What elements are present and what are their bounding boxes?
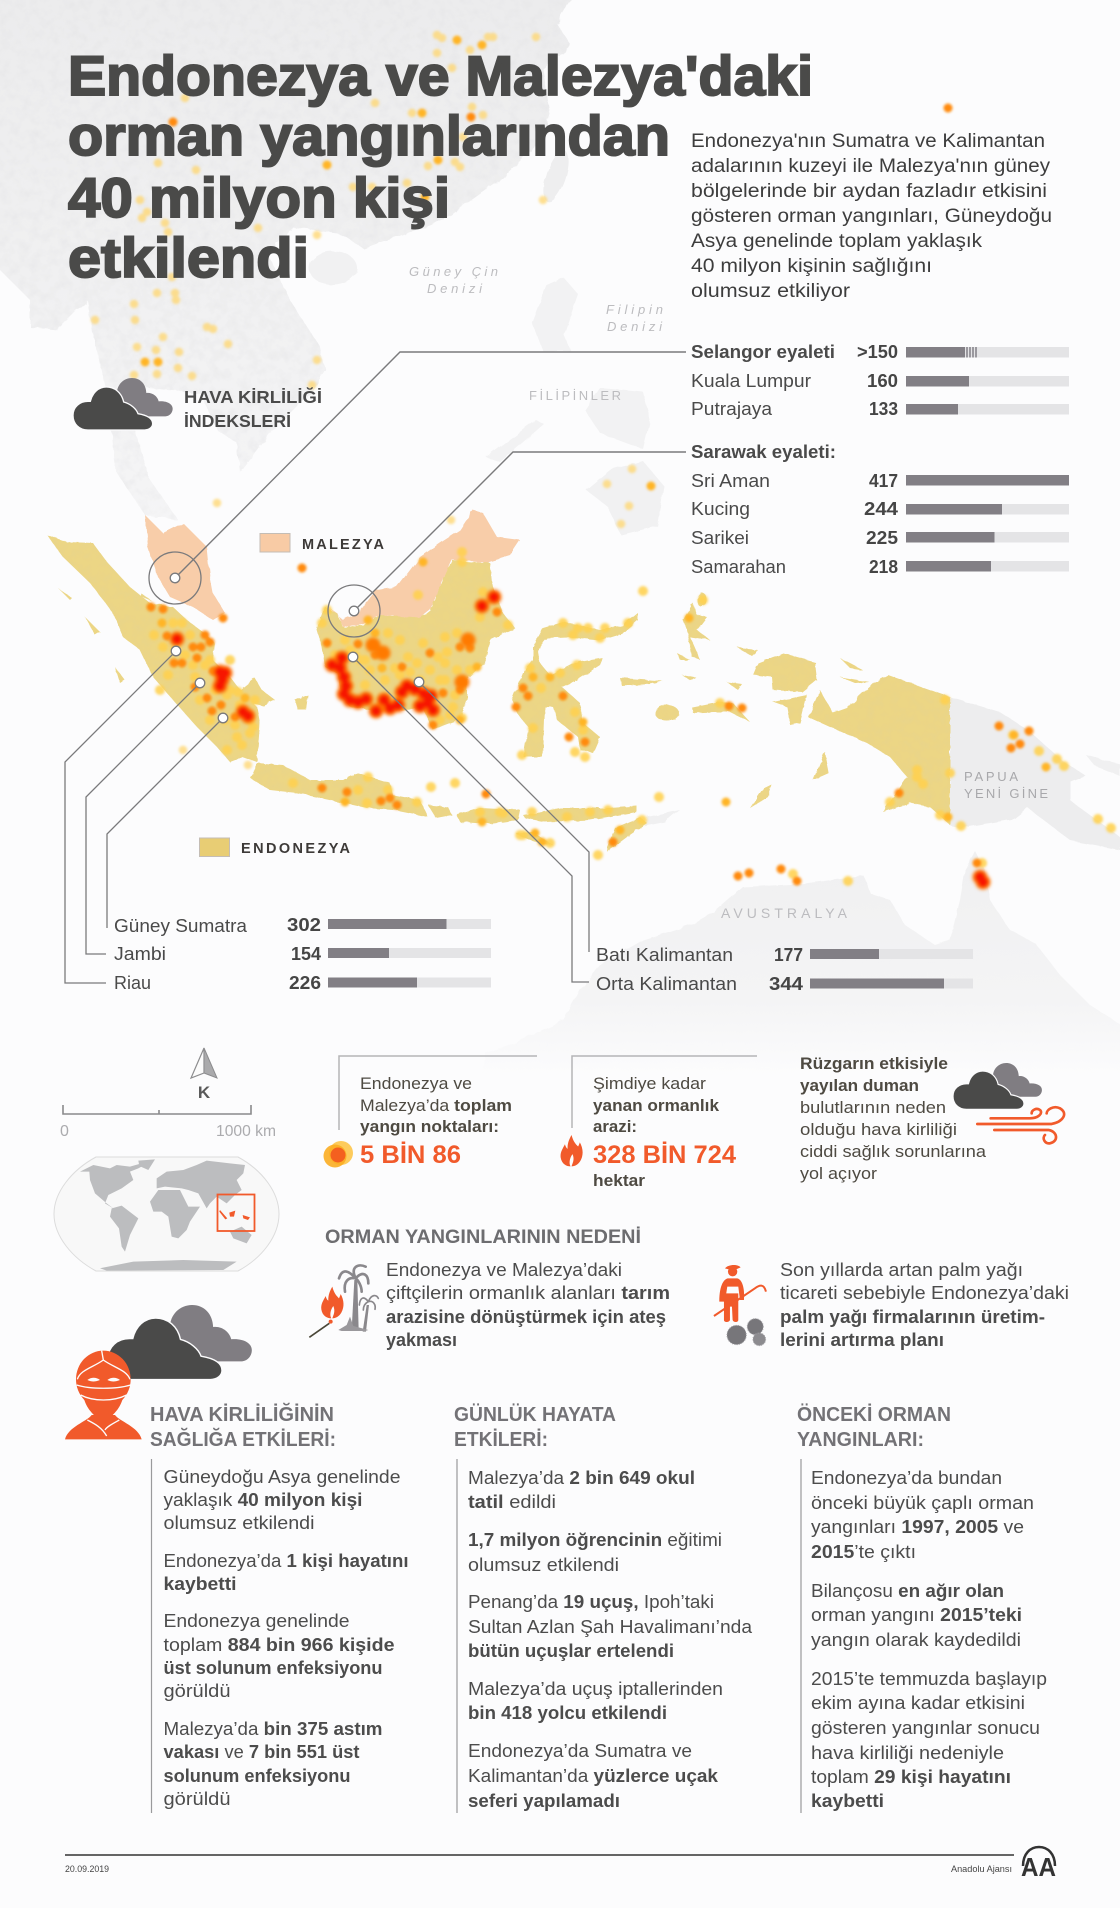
sea and country labels: YENİ GİNE (964, 786, 1048, 801)
stat: burned forest area: hektar (593, 1172, 646, 1190)
text: cause one (386, 1260, 670, 1350)
chart: Kalimantan air pollution bars (596, 945, 973, 994)
stat: total fire points: Malezya’da toplam (360, 1097, 512, 1115)
sea and country labels: Denizi (607, 319, 663, 334)
text: cause two: Son yıllarda artan palm yağı (780, 1260, 1023, 1280)
title: 40 milyon kişi (68, 166, 450, 229)
stat: burned forest area: Şimdiye kadar (593, 1075, 707, 1093)
chart: Sarawak air pollution bars: Samarahan (691, 557, 786, 577)
chart: Kalimantan air pollution bars: 344 (769, 974, 803, 994)
chart: Sarawak air pollution bars: 417 (869, 471, 898, 491)
chart: Sumatra air pollution bars (114, 915, 491, 993)
chart: Sarawak air pollution bars: 244 (864, 499, 898, 519)
icon: fire dot (324, 1141, 353, 1168)
stat: total fire points: 5 BİN 86 (360, 1141, 461, 1169)
column: effects on daily life: Kalimantan’da yüzlerce uçak (468, 1766, 719, 1786)
column: health effects: görüldü (164, 1681, 230, 1701)
text: smoke effect: olduğu hava kirliliği (800, 1121, 957, 1139)
column: health effects: Malezya’da bin 375 astım (164, 1719, 382, 1739)
sea and country labels: FİLİPİNLER (529, 388, 621, 403)
chart: Sumatra air pollution bars: Jambi (114, 944, 166, 964)
column: previous forest fires: toplam 29 kişi hayatını (811, 1767, 1011, 1787)
chart: Selangor air pollution bars: Putrajaya (691, 399, 773, 419)
column: previous forest fires: ÖNCEKİ ORMAN (797, 1403, 951, 1426)
text: cause one: Endonezya ve Malezya’daki (386, 1260, 622, 1280)
column: effects on daily life: bütün uçuşlar ertelendi (468, 1641, 674, 1661)
text: cause one: yakması (386, 1330, 457, 1350)
column: previous forest fires: yangınları 1997, 2005 ve (811, 1517, 1024, 1537)
text: smoke effect: bulutlarının neden (800, 1099, 946, 1117)
icon: clouds and wind (953, 1063, 1064, 1143)
column: health effects: toplam 884 bin 966 kişide (164, 1635, 394, 1655)
stat: burned forest area: arazi: (593, 1118, 637, 1136)
icon: clouds with air pollution index heading (73, 378, 322, 431)
chart: Kalimantan air pollution bars: 177 (774, 945, 803, 965)
column: previous forest fires: gösteren yangınlar sonucu (811, 1718, 1040, 1738)
column: previous forest fires: hava kirliliği nedeniyle (811, 1743, 1004, 1763)
chart: Sumatra air pollution bars: 154 (291, 944, 321, 964)
title: orman yangınlarından (68, 104, 670, 167)
chart: Sumatra air pollution bars: 226 (289, 973, 321, 993)
chart: Selangor air pollution bars: Kuala Lumpur (691, 371, 811, 391)
intro text: Asya genelinde toplam yaklaşık (691, 231, 983, 252)
chart: Sarawak air pollution bars: Sarikei (691, 528, 749, 548)
column: health effects: HAVA KİRLİLİĞİNİN (150, 1402, 334, 1426)
legend: Malezya: MALEZYA (302, 537, 385, 553)
column: previous forest fires: ekim ayına kadar etkisini (811, 1693, 1025, 1713)
map: surrounding gray landmasses (0, 0, 1120, 1080)
column: previous forest fires: orman yangını 2015’teki (811, 1605, 1022, 1625)
chart: Sarawak air pollution bars: Sarawak eyaleti: (691, 442, 836, 462)
sea and country labels: Güney Çin (409, 264, 498, 279)
column: previous forest fires: 2015’te temmuzda başlayıp (811, 1669, 1047, 1689)
sea and country labels (409, 264, 1048, 921)
intro text: gösteren orman yangınları, Güneydoğu (691, 206, 1052, 227)
text: smoke effect (800, 1055, 987, 1183)
text: cause one: çiftçilerin ormanlık alanları tarım (386, 1283, 670, 1303)
stat: total fire points: yangın noktaları: (360, 1118, 499, 1136)
column: health effects: yaklaşık 40 milyon kişi (164, 1490, 362, 1510)
intro text (691, 131, 1052, 302)
column: health effects: vakası ve 7 bin 551 üst (164, 1742, 360, 1762)
chart: Sarawak air pollution bars: Sri Aman (691, 471, 770, 491)
icon: north arrow (191, 1048, 217, 1102)
title: etkilendi (68, 226, 309, 289)
legend: Endonezya: ENDONEZYA (241, 841, 351, 857)
column: effects on daily life: Malezya’da 2 bin 649 okul (468, 1468, 695, 1488)
column: effects on daily life (454, 1403, 753, 1813)
column: health effects: Endonezya genelinde (164, 1611, 350, 1631)
column: effects on daily life: bin 418 yolcu etkilendi (468, 1703, 667, 1723)
stat: total fire points: Endonezya ve (360, 1075, 472, 1093)
column: effects on daily life: Sultan Azlan Şah Havalimanı’nda (468, 1617, 753, 1637)
text: cause two: ticareti sebebiyle Endonezya’daki (780, 1283, 1069, 1303)
title: Endonezya ve Malezya'daki (68, 44, 813, 107)
chart: Sumatra air pollution bars: Güney Sumatra (114, 916, 248, 936)
icon: north arrow: K (198, 1083, 211, 1102)
sea and country labels: Denizi (427, 281, 483, 296)
column: previous forest fires: önceki büyük çaplı orman (811, 1493, 1034, 1513)
chart: Selangor air pollution bars: 160 (867, 371, 898, 391)
column: previous forest fires: Bilançosu en ağır olan (811, 1581, 1004, 1601)
locator globe (54, 1157, 279, 1271)
heading: causes of forest fires: ORMAN YANGINLARININ NEDENİ (325, 1225, 641, 1248)
column: health effects: solunum enfeksiyonu (164, 1766, 350, 1786)
column: health effects: görüldü (164, 1789, 230, 1809)
chart: Sarawak air pollution bars: 218 (869, 557, 898, 577)
text: cause two (780, 1260, 1069, 1350)
chart: Selangor air pollution bars (691, 342, 1069, 419)
chart: Sarawak air pollution bars: 225 (866, 528, 898, 548)
map scale bar: 1000 km (216, 1123, 276, 1140)
icon: clouds with air pollution index heading: HAVA KİRLİLİĞİ (184, 386, 322, 407)
chart: Sarawak air pollution bars (691, 442, 1069, 577)
icon: flame (561, 1135, 583, 1166)
column: effects on daily life: olumsuz etkilendi (468, 1555, 619, 1575)
text: cause two: lerini artırma planı (780, 1330, 944, 1350)
column: previous forest fires: 2015’te çıktı (811, 1542, 916, 1562)
chart: Kalimantan air pollution bars: Batı Kalimantan (596, 945, 733, 965)
footer (65, 1847, 1056, 1882)
column: effects on daily life: seferi yapılamadı (468, 1791, 620, 1811)
map: fire hotspots (95, 35, 1111, 882)
map: Malaysia territory (145, 510, 520, 627)
column: effects on daily life: tatil edildi (468, 1492, 556, 1512)
title (68, 44, 813, 289)
footer: Anadolu Ajansı (951, 1864, 1012, 1874)
logo: Anadolu Agency: AA (1021, 1852, 1056, 1882)
column: effects on daily life: Endonezya’da Sumatra ve (468, 1741, 692, 1761)
stat: burned forest area: yanan ormanlık (593, 1097, 720, 1115)
column: previous forest fires: yangın olarak kaydedildi (811, 1630, 1021, 1650)
icon: clouds with air pollution index heading: İNDEKSLERİ (184, 411, 291, 431)
icon: person in mask under clouds (65, 1305, 252, 1439)
icon: palm trees and match (309, 1265, 378, 1337)
column: effects on daily life: 1,7 milyon öğrencinin eğitimi (468, 1530, 722, 1550)
intro text: bölgelerinde bir aydan fazladır etkisini (691, 181, 1047, 202)
intro text: Endonezya'nın Sumatra ve Kalimantan (691, 131, 1045, 152)
chart: Sarawak air pollution bars: Kucing (691, 499, 750, 519)
text: smoke effect: yol açıyor (800, 1165, 878, 1183)
column: previous forest fires (797, 1403, 1047, 1813)
chart: Selangor air pollution bars: >150 (857, 342, 898, 362)
legend: Endonezya (200, 838, 351, 857)
column: health effects: SAĞLIĞA ETKİLERİ: (150, 1427, 336, 1451)
text: smoke effect: ciddi sağlık sorunlarına (800, 1143, 987, 1161)
intro text: adalarının kuzeyi ile Malezya'nın güney (691, 156, 1051, 177)
sea and country labels: AVUSTRALYA (721, 905, 848, 921)
column: health effects: Endonezya’da 1 kişi hayatını (164, 1551, 408, 1571)
footer: 20.09.2019 (65, 1864, 109, 1874)
chart: Sumatra air pollution bars: 302 (287, 915, 321, 935)
chart: Selangor air pollution bars: Selangor eyaleti (691, 342, 835, 362)
chart: Kalimantan air pollution bars: Orta Kalimantan (596, 974, 737, 994)
map scale bar (60, 1105, 276, 1140)
column: health effects: Güneydoğu Asya genelinde (164, 1467, 400, 1487)
map: Indonesia territory (47, 535, 950, 852)
text: cause two: palm yağı firmalarının üretim- (780, 1307, 1045, 1327)
text: cause one: arazisine dönüştürmek için ateş (386, 1307, 666, 1327)
icon: palm oil worker and fruit (714, 1265, 766, 1346)
stat: burned forest area: 328 BİN 724 (593, 1141, 736, 1169)
sea and country labels: Filipin (606, 302, 663, 317)
column: effects on daily life: Penang’da 19 uçuş, Ipoh’taki (468, 1592, 714, 1612)
chart: Sumatra air pollution bars: Riau (114, 973, 151, 993)
intro text: 40 milyon kişinin sağlığını (691, 256, 932, 277)
intro text: olumsuz etkiliyor (691, 281, 851, 302)
text: smoke effect: yayılan duman (800, 1077, 919, 1095)
stat: total fire points (324, 1056, 537, 1169)
column: health effects (150, 1402, 408, 1813)
column: previous forest fires: Endonezya’da bundan (811, 1468, 1002, 1488)
column: effects on daily life: Malezya’da uçuş iptallerinden (468, 1679, 723, 1699)
callout lines and markers (65, 352, 686, 983)
sea and country labels: PAPUA (964, 769, 1018, 784)
column: previous forest fires: YANGINLARI: (797, 1429, 924, 1451)
map scale bar: 0 (60, 1123, 69, 1140)
column: health effects: olumsuz etkilendi (164, 1513, 314, 1533)
column: effects on daily life: GÜNLÜK HAYATA (454, 1403, 616, 1426)
column: effects on daily life: ETKİLERİ: (454, 1428, 548, 1451)
column: health effects: kaybetti (164, 1574, 236, 1594)
column: health effects: üst solunum enfeksiyonu (164, 1658, 382, 1678)
chart: Selangor air pollution bars: 133 (869, 399, 898, 419)
stat: burned forest area (561, 1056, 757, 1190)
text: smoke effect: Rüzgarın etkisiyle (800, 1055, 948, 1073)
legend: Malezya (260, 534, 385, 553)
column: previous forest fires: kaybetti (811, 1791, 884, 1811)
